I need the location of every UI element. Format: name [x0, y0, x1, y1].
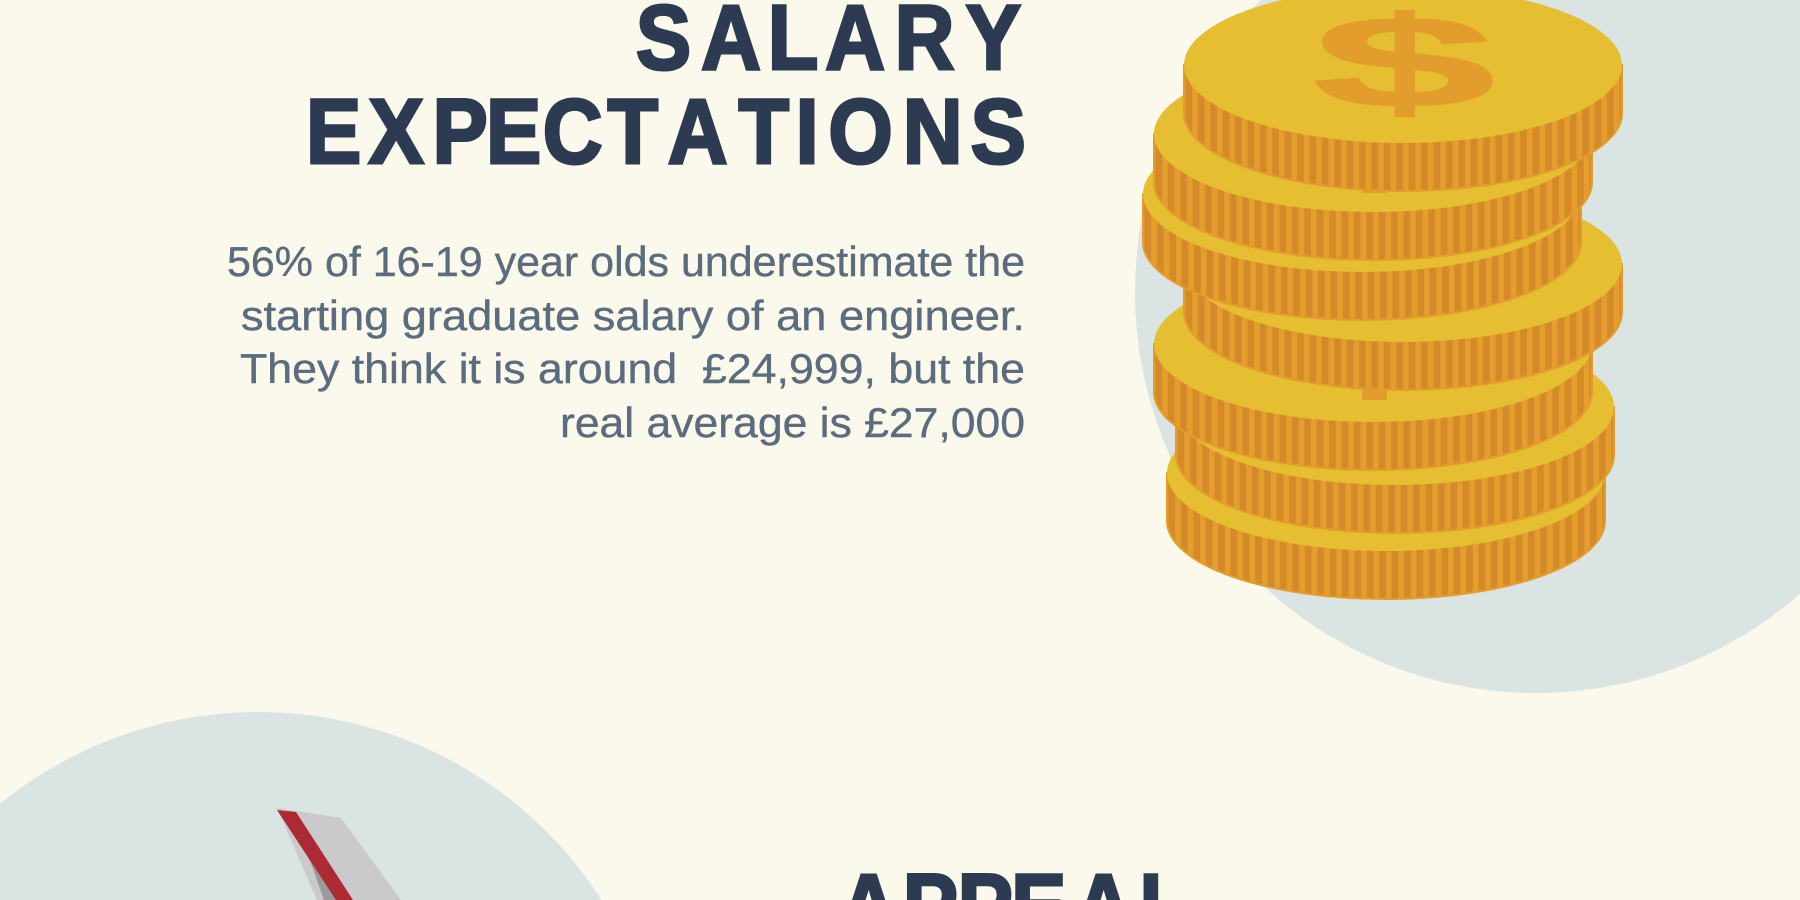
coin 4 — [1184, 186, 1622, 390]
text block: salary statistic: They think it is around £24,999, but the — [240, 345, 1025, 392]
text block: salary statistic — [227, 238, 1025, 446]
icon: plane tail — [277, 808, 401, 900]
text block: salary statistic: real average is £27,000 — [560, 399, 1025, 446]
coin 6 — [1176, 329, 1614, 533]
heading: salary expectations — [306, 0, 1026, 183]
coin 5 — [1154, 266, 1592, 470]
circle: behind plane — [0, 712, 666, 900]
text block: salary statistic: starting graduate salary of an engineer. — [241, 292, 1025, 339]
coin 7 — [1167, 395, 1605, 599]
coin 2 — [1154, 56, 1592, 260]
icon: stack of coins — [1143, 0, 1622, 599]
coin 3 — [1143, 116, 1581, 320]
heading: salary expectations: EXPECTATIONS — [306, 80, 1026, 183]
circle: behind coins — [1135, 0, 1800, 693]
text block: salary statistic: 56% of 16-19 year olds underestimate the — [227, 238, 1025, 285]
coin 1 with dollar sign — [1184, 0, 1622, 191]
